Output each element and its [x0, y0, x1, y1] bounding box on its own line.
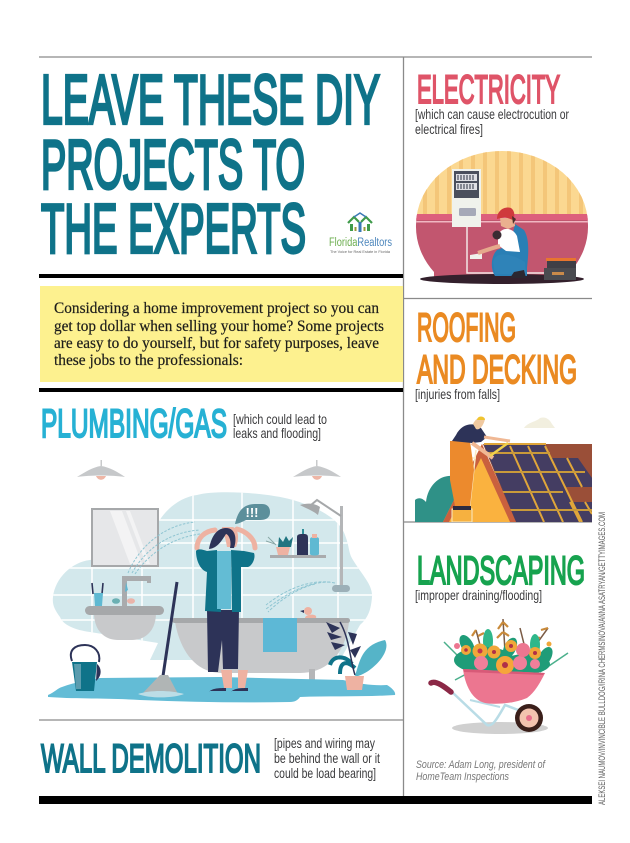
text: photo credit: ALEKSEI NAUMOV/INVINCIBLE BULLDOG/IRINA CHERMSINOVA/ANNA ASATRYAN/GETTYIMAGES.COM — [597, 512, 607, 805]
flowers — [454, 640, 552, 674]
illustration: electrician — [410, 148, 595, 284]
foliage and stems — [444, 619, 568, 680]
text: landscaping note: [improper draining/flooding] — [415, 587, 542, 603]
gable — [443, 444, 515, 522]
text: plumbing note: [which could lead to — [233, 411, 327, 427]
logo wordmark: FloridaRealtors — [329, 237, 392, 249]
text: wall demolition note: be behind the wall or it — [274, 750, 380, 766]
heading: plumbing/gas: PLUMBING/GAS — [41, 402, 227, 446]
wheel — [515, 704, 543, 732]
logo: Florida Realtors — [329, 213, 392, 254]
wire — [467, 226, 545, 273]
potted plant — [326, 622, 386, 690]
mirror — [92, 509, 158, 566]
text: wall demolition note — [274, 735, 380, 781]
icon: speech bubble: !!! — [246, 505, 258, 520]
text: wall demolition note: could be load bearing] — [274, 765, 376, 781]
box — [452, 509, 472, 522]
icon: rubber duck — [300, 607, 316, 618]
text: plumbing note: leaks and flooding] — [233, 425, 321, 441]
text: source: Source: Adam Long, president of — [416, 759, 546, 771]
heading: roofing and decking — [417, 306, 577, 392]
illustration: roofer — [415, 417, 592, 522]
bathroom wall tiles — [50, 490, 375, 665]
shelf with plant and bottles — [266, 529, 326, 558]
person — [196, 527, 255, 692]
intro text — [54, 300, 384, 369]
intro text: Considering a home improvement project so you can — [54, 300, 379, 317]
text: wall demolition note: [pipes and wiring may — [274, 735, 375, 751]
title: THE EXPERTS — [41, 190, 306, 268]
floor water — [48, 677, 395, 702]
leaves — [454, 629, 556, 689]
intro text: these jobs to the professionals: — [54, 352, 243, 369]
icon: speech bubble — [235, 504, 270, 524]
water spray from shower — [266, 582, 335, 612]
toolbox — [544, 258, 576, 280]
bushes — [415, 476, 454, 522]
icon: houses — [348, 213, 372, 232]
icon: right ceiling lamp — [293, 460, 341, 480]
panel: landscaping — [415, 549, 585, 783]
icon: toothbrush cup — [92, 583, 103, 606]
water spray from faucet — [128, 522, 200, 574]
illustration: flooded bathroom — [48, 460, 395, 702]
shadow — [452, 722, 548, 734]
ladder — [470, 450, 477, 506]
title — [41, 60, 380, 268]
towel — [263, 618, 297, 652]
intro text: get top dollar when selling your home? Some projects — [54, 318, 384, 335]
bathtub — [172, 618, 350, 683]
title: PROJECTS TO — [41, 126, 305, 204]
logo tagline: The Voice for Real Estate in Florida — [330, 250, 391, 254]
roofer figure — [450, 417, 510, 510]
handle — [431, 682, 451, 692]
mop — [138, 582, 184, 697]
shower — [300, 500, 350, 592]
text: source — [416, 759, 546, 783]
wall — [416, 151, 588, 276]
text: source: HomeTeam Inspections — [416, 771, 509, 783]
panel: intro callout — [40, 286, 403, 382]
frame — [452, 692, 526, 725]
electrical panel — [452, 169, 481, 227]
bucket — [71, 645, 101, 691]
heading: roofing and decking: ROOFING — [417, 306, 516, 350]
ground shadow — [420, 274, 584, 284]
panel: roofing and decking — [415, 306, 592, 522]
roof — [483, 444, 592, 522]
cloud — [524, 417, 555, 428]
icon: left ceiling lamp — [77, 460, 125, 480]
panel: electricity — [410, 68, 595, 284]
sink — [85, 576, 164, 640]
text: electricity note: electrical fires] — [415, 121, 483, 137]
text: plumbing note — [233, 411, 327, 441]
text: electricity note — [415, 106, 569, 137]
text: electricity note: [which can cause electrocution or — [415, 106, 569, 122]
electrician figure — [470, 207, 528, 278]
text: roofing note: [injuries from falls] — [415, 386, 500, 402]
intro text: are easy to do yourself, but for safety purposes, leave — [54, 335, 379, 352]
heading: wall demolition: WALL DEMOLITION — [41, 737, 261, 781]
illustration: wheelbarrow — [431, 619, 568, 734]
wheelbarrow tub — [463, 669, 545, 704]
